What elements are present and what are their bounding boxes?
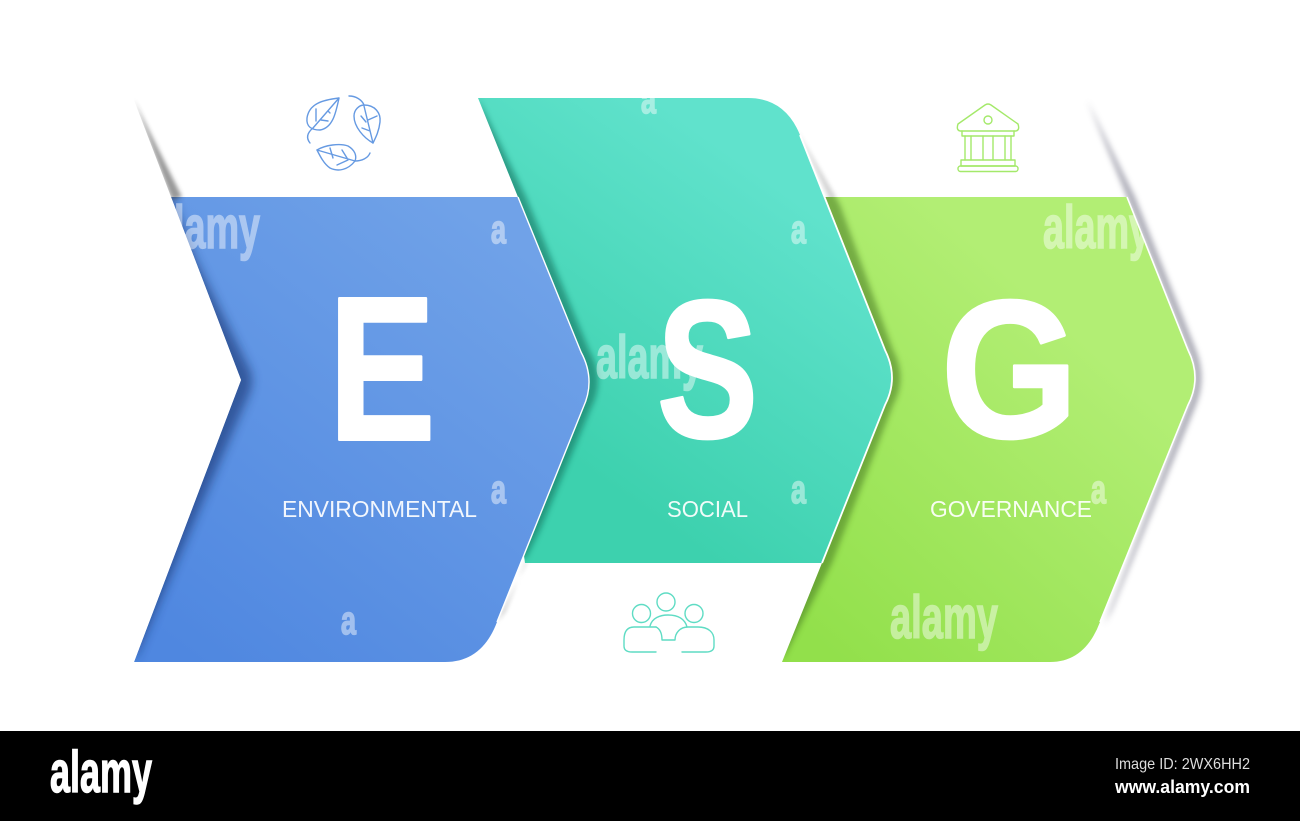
label: governance: GOVERNANCE <box>930 496 1092 522</box>
watermarks: alamy <box>1043 194 1150 261</box>
label: social: SOCIAL <box>667 496 748 522</box>
label: environmental: ENVIRONMENTAL <box>282 496 477 522</box>
shadow: outer right edge <box>1087 100 1202 625</box>
image id: Image ID: 2WX6HH2 <box>1115 756 1250 773</box>
watermarks: a <box>791 468 807 512</box>
watermarks: a <box>1091 468 1107 512</box>
watermarks: a <box>341 599 357 643</box>
icon: recycling leaves <box>307 96 380 170</box>
website: www.alamy.com <box>1114 777 1250 797</box>
watermarks: alamy <box>153 194 260 261</box>
panel: environmental arrow <box>134 196 590 662</box>
watermarks: a <box>491 468 507 512</box>
watermarks: alamy <box>596 324 703 391</box>
watermarks: alamy <box>890 584 998 651</box>
panel: social arrow <box>478 98 892 563</box>
letter S: S <box>657 260 758 479</box>
white notch <box>0 85 241 680</box>
watermarks <box>153 78 1150 651</box>
shadow: blue on teal <box>478 98 598 558</box>
letter E: E <box>328 254 436 484</box>
shadow: teal top right on white <box>797 130 836 205</box>
icon: bank building <box>957 104 1019 172</box>
shadow: teal on green <box>782 190 900 662</box>
shadow: top left edge on white <box>134 100 182 200</box>
watermarks: a <box>641 78 657 122</box>
footer bar <box>0 731 1300 821</box>
icon: people group <box>624 593 714 652</box>
shadow: blue bottom right on white <box>497 560 528 622</box>
footer logo: alamy <box>50 740 152 805</box>
panel: governance arrow <box>782 190 1195 662</box>
watermarks: a <box>791 208 807 252</box>
letter G: G <box>941 260 1078 479</box>
shadow: white notch on blue <box>136 197 258 660</box>
watermarks: a <box>491 208 507 252</box>
